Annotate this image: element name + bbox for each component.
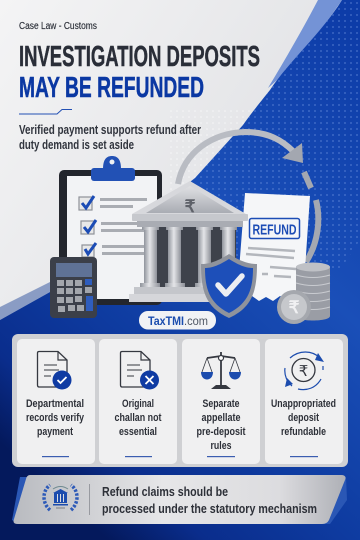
refund stamp: REFUND xyxy=(252,222,297,238)
label xyxy=(26,398,84,438)
illustration: clipboard xyxy=(59,156,162,305)
icon: scales xyxy=(201,352,241,389)
title underline xyxy=(19,110,72,114)
label: rules xyxy=(210,440,232,452)
illustration: refund document xyxy=(237,193,310,301)
illustration: shield xyxy=(201,254,257,318)
card: unappropriated deposit xyxy=(265,339,343,464)
icon: rupee with arrows: ₹ xyxy=(299,363,308,380)
label: pre-deposit xyxy=(196,426,246,438)
label: Unappropriated xyxy=(271,398,336,410)
label: Original xyxy=(122,398,154,410)
label: essential xyxy=(119,426,157,438)
label: records verify xyxy=(26,412,84,424)
illustration: calculator xyxy=(50,257,97,318)
illustration: coins: ₹ xyxy=(289,298,300,317)
label: deposit xyxy=(288,412,319,424)
subtitle xyxy=(19,123,201,152)
card: departmental records xyxy=(17,339,95,464)
icon: emblem xyxy=(44,485,77,510)
label: appellate xyxy=(202,412,240,424)
label xyxy=(271,398,336,438)
banner: statutory mechanism xyxy=(12,475,347,524)
label xyxy=(196,398,246,452)
banner text xyxy=(102,484,317,516)
illustration: circular arrow xyxy=(178,132,318,262)
banner text: processed under the statutory mechanism xyxy=(102,501,317,516)
checklist rows xyxy=(79,196,147,257)
illustration: bank building: ₹ xyxy=(185,197,196,216)
label: refundable xyxy=(281,426,326,438)
label xyxy=(114,398,162,438)
card: appellate rules xyxy=(182,339,260,464)
illustration: bank building xyxy=(129,181,248,302)
title xyxy=(19,41,260,104)
label: payment xyxy=(37,426,73,438)
watermark: TaxTMI.com: .com xyxy=(184,314,208,328)
title: MAY BE REFUNDED xyxy=(19,72,204,104)
label: Departmental xyxy=(26,398,84,410)
watermark: TaxTMI.com: TaxTMI xyxy=(148,314,184,328)
icon: document with cross xyxy=(120,352,159,390)
subtitle: duty demand is set aside xyxy=(19,138,134,152)
icon: document with check xyxy=(38,352,72,390)
panel: key points xyxy=(12,334,348,467)
label: Separate xyxy=(202,398,240,410)
illustration: coins xyxy=(277,262,330,324)
card: original challan xyxy=(99,339,177,464)
banner text: Refund claims should be xyxy=(102,484,228,499)
watermark: TaxTMI.com xyxy=(139,311,216,330)
label: challan not xyxy=(114,412,162,424)
eyebrow: Case Law - Customs: Case Law - Customs xyxy=(19,21,97,32)
subtitle: Verified payment supports refund after xyxy=(19,123,201,137)
